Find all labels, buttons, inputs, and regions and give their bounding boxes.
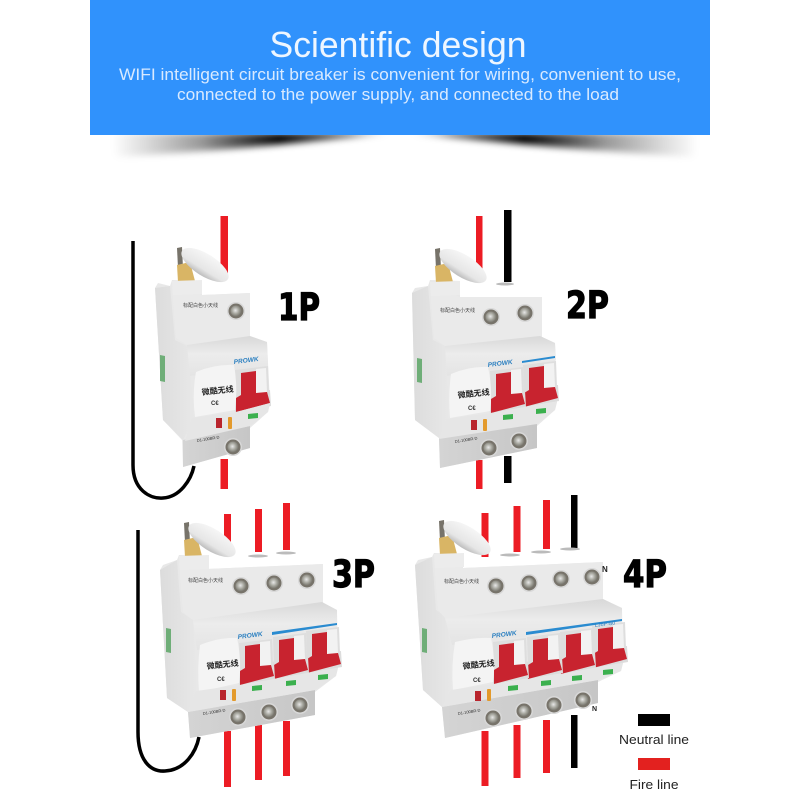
breaker 4P wiring diagram [415, 495, 667, 786]
fire line wires 3P [224, 503, 290, 787]
breaker body 4P: 标配白色小天线 [444, 578, 479, 585]
neutral loop wire 1P [133, 241, 194, 498]
breaker body 3P: 微酷无线 [206, 658, 239, 671]
breaker body 3P [160, 552, 342, 738]
breaker body 2P: 标配白色小天线 [440, 307, 475, 314]
legend [619, 714, 689, 792]
label 2P: 2P [566, 284, 609, 327]
breaker body 2P: PROWK [487, 359, 514, 369]
breaker body 3P: PROWK [237, 631, 264, 641]
antenna 2P [430, 242, 492, 296]
title: Scientific design [270, 24, 526, 65]
breaker body 4P: D1-100BR-D [457, 707, 481, 716]
breaker body 3P: 标配白色小天线 [188, 577, 223, 584]
breaker body 2P: D1-100BR-D [454, 435, 478, 444]
wires 2P [476, 210, 512, 489]
breaker body 4P [415, 548, 628, 738]
breaker body 4P: N [602, 565, 608, 574]
breaker body 3P: D1-100BR-D [202, 707, 226, 716]
breaker 3P wiring diagram [138, 503, 375, 787]
breaker body 4P: LJ6P-80 [595, 621, 616, 629]
subtitle: WIFI intelligent circuit breaker is convenient for wiring, convenient to use, [119, 66, 681, 84]
legend: neutral line: Neutral line [619, 732, 689, 747]
antenna 1P [172, 241, 234, 295]
header banner [90, 0, 710, 135]
breaker body 1P [155, 280, 271, 467]
breaker body 1P: PROWK [233, 356, 260, 366]
breaker body 4P: C€ [473, 678, 481, 684]
label 1P: 1P [278, 286, 320, 329]
banner shadow [112, 133, 698, 157]
wires 4P [482, 495, 578, 786]
legend: fire line: Fire line [630, 777, 678, 792]
breaker body 3P: C€ [217, 677, 225, 683]
breaker body 1P: C€ [211, 401, 219, 407]
antenna 4P [434, 514, 496, 568]
breaker body 2P [412, 280, 559, 468]
label 4P: 4P [623, 553, 667, 596]
breaker body 2P: 微酷无线 [457, 387, 490, 400]
subtitle: connected to the power supply, and connected to the load [177, 86, 619, 104]
breaker 1P wiring diagram [133, 216, 320, 498]
neutral loop wire 3P [138, 530, 199, 771]
fire line wires 1P [220, 216, 228, 489]
breaker body 1P: 微酷无线 [201, 384, 234, 397]
breaker body 4P: N [592, 706, 597, 713]
breaker body 1P: 标配白色小天线 [183, 302, 218, 309]
subtitle [119, 66, 681, 104]
breaker body 1P: D1-100BR-D [196, 434, 220, 443]
antenna 3P [179, 516, 241, 570]
breaker body 4P: 微酷无线 [462, 658, 495, 671]
label 3P: 3P [332, 553, 375, 596]
breaker body 2P: C€ [468, 406, 476, 412]
breaker 2P wiring diagram [412, 210, 609, 489]
breaker body 4P: PROWK [491, 630, 518, 640]
